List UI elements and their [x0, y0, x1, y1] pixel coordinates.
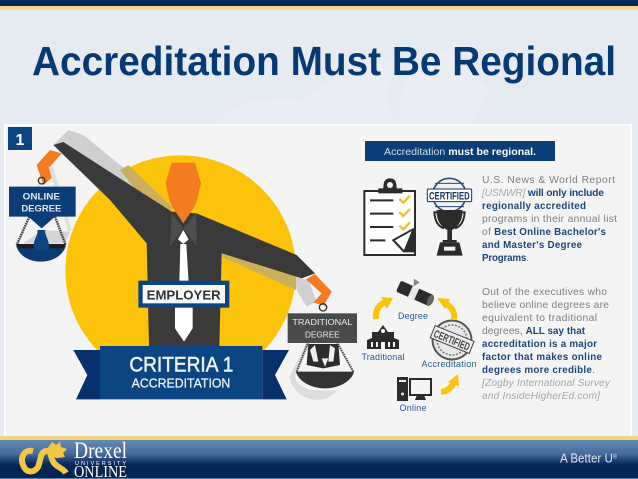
arrow head: online to accreditation [448, 374, 459, 386]
arrow head: traditional to degree [381, 297, 393, 309]
collar [170, 213, 197, 246]
text block: executives: equivalent to traditional [482, 313, 597, 324]
online degree scale: DEGREE [21, 204, 61, 214]
heading bar: Accreditation must be regional. [384, 147, 536, 158]
text block: executives: Out of the executives who [482, 287, 607, 298]
arrow: traditional to degree [376, 302, 385, 319]
tie [175, 230, 193, 342]
text block: executives: [Zogby International Survey [481, 378, 611, 389]
yellow circle [65, 155, 296, 386]
icon: computer [397, 377, 431, 401]
title: Accreditation Must Be Regional [32, 38, 616, 84]
footer band [0, 436, 638, 479]
icon: certified trophy: CERTIFIED [429, 190, 470, 202]
traditional degree scale [288, 304, 357, 400]
cycle diagram [362, 274, 476, 413]
text block: USNWR: programs in their annual list [482, 214, 617, 225]
icon: certified stamp: CERTIFIED [432, 328, 472, 354]
logo: wordmark [74, 438, 127, 479]
employer sign: EMPLOYER [147, 287, 221, 302]
text block: USNWR: of Best Online Bachelor's [482, 227, 607, 238]
head [166, 163, 201, 223]
label: degree: Degree [398, 311, 428, 321]
text block: executives: degrees, ALL say that [482, 326, 586, 337]
text block: USNWR [481, 175, 617, 264]
text block: USNWR: Programs. [482, 253, 529, 264]
panel: infographic [4, 124, 632, 437]
badge number 1: 1 [16, 132, 25, 149]
label: online: Online [400, 403, 426, 413]
arm shadows [53, 130, 317, 307]
text block: executives [481, 287, 611, 402]
text block: executives: factor that makes online [482, 352, 603, 363]
traditional degree scale: DEGREE [305, 330, 340, 340]
traditional degree scale: TRADITIONAL [292, 317, 353, 327]
text block: executives: degrees more credible. [482, 365, 595, 376]
ribbon: criteria 1 accreditation: ACCREDITATION [132, 377, 230, 391]
ribbon: criteria 1 accreditation [73, 346, 289, 399]
label: traditional: Traditional [362, 352, 404, 362]
arrow: accreditation to degree [444, 303, 454, 319]
text block: USNWR: and Master's Degree [482, 240, 583, 251]
top band [0, 0, 638, 10]
badge number 1 [8, 127, 32, 150]
left hand [37, 150, 62, 185]
text block: USNWR: regionally accredited [482, 201, 586, 212]
arrow head: accreditation to degree [437, 298, 450, 309]
logo: wordmark: Drexel [74, 438, 127, 463]
illustration: employer weighing degrees [9, 130, 357, 400]
label: accreditation: Accreditation [422, 359, 476, 369]
text block: executives: believe online degrees are [482, 300, 609, 311]
text block: USNWR: U.S. News & World Report [482, 175, 615, 186]
text block: executives: and InsideHigherEd.com] [482, 391, 601, 402]
arrow: online to accreditation [441, 380, 454, 392]
icon: certified trophy [427, 178, 472, 256]
icon: school [367, 325, 399, 349]
icon: diploma [396, 274, 438, 308]
text block: executives: accreditation is a major [482, 339, 597, 350]
icon: checklist clipboard [364, 178, 415, 255]
logo: wordmark: UNIVERSITY [75, 461, 126, 467]
online degree scale [9, 167, 76, 262]
right hand [306, 274, 332, 307]
employer sign [138, 281, 229, 308]
logo: dragon [22, 442, 67, 473]
heading bar [365, 141, 555, 161]
online degree scale: ONLINE [23, 191, 60, 201]
text block: USNWR: [USNWR] will only include [481, 188, 604, 199]
employer body [53, 142, 315, 347]
tagline: A Better U [560, 452, 617, 466]
ribbon: criteria 1 accreditation: CRITERIA 1 [129, 353, 233, 377]
tagline: ® [613, 454, 618, 460]
